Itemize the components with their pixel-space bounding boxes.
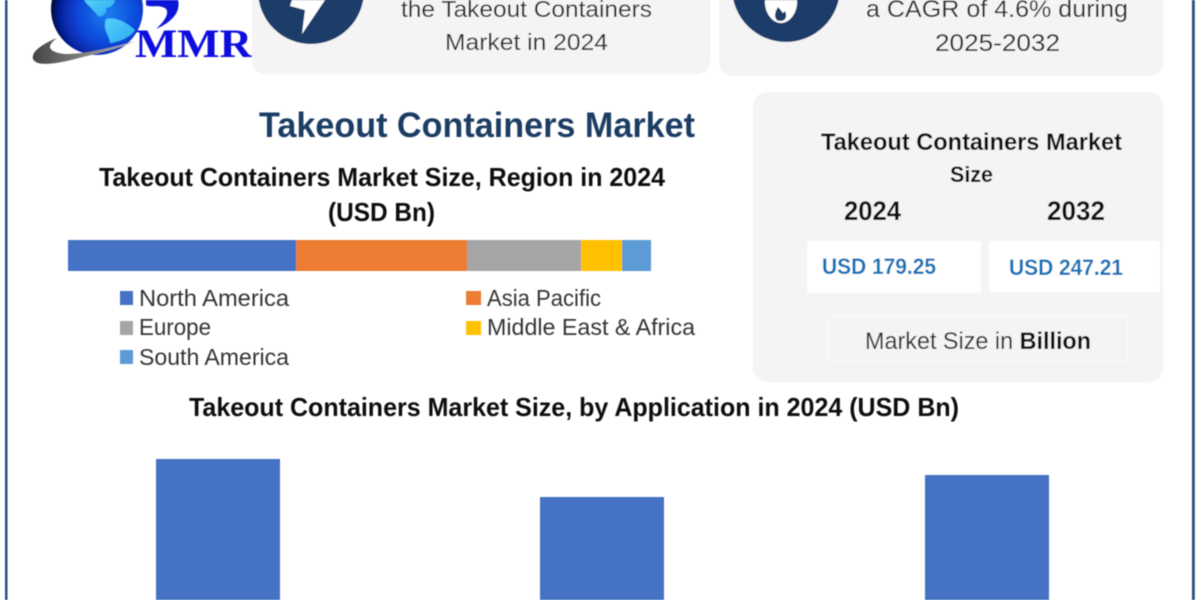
icon: blue swirl <box>146 0 179 29</box>
legend: regions <box>120 285 695 370</box>
bar chart: application <box>156 459 1049 600</box>
panel heading: Size <box>950 162 993 187</box>
unit note: Market Size in Billion <box>865 328 1091 355</box>
icon: globe <box>51 0 143 55</box>
legend: regions: South America <box>139 344 289 370</box>
icon: flame badge <box>732 0 840 42</box>
value box 2024 <box>807 241 981 293</box>
legend: regions: Middle East & Africa <box>487 314 695 340</box>
callout text: CAGR <box>866 0 1128 57</box>
heading: application chart: Takeout Containers Market Size, by Application in 2024 (USD Bn) <box>189 392 959 422</box>
callout text: market value <box>401 0 652 55</box>
legend: regions: Asia Pacific <box>487 285 601 311</box>
panel: CAGR callout <box>719 0 1163 76</box>
panel heading <box>821 129 1122 187</box>
icon: grey swoosh <box>33 38 136 64</box>
legend: regions: Europe <box>139 314 211 340</box>
year labels <box>844 196 1105 226</box>
heading: region chart: (USD Bn) <box>328 197 435 227</box>
value box 2032: USD 247.21 <box>1009 255 1123 280</box>
panel: market value callout <box>252 0 710 74</box>
callout text: CAGR: 2025-2032 <box>935 30 1060 57</box>
callout text: market value: Market in 2024 <box>445 29 608 55</box>
unit note <box>828 316 1128 360</box>
logo wordmark: MMR <box>135 21 253 66</box>
heading: region chart: Takeout Containers Market Size, Region in 2024 <box>99 162 666 192</box>
title: Takeout Containers Market <box>259 106 695 145</box>
heading: region chart <box>99 162 666 227</box>
icon: lightning bolt badge <box>258 0 364 44</box>
value box 2024: USD 179.25 <box>822 254 936 279</box>
panel heading: Takeout Containers Market <box>821 129 1122 156</box>
year labels: 2032 <box>1047 196 1105 226</box>
logo: MMR globe <box>33 0 253 66</box>
panel: market size <box>753 92 1163 382</box>
year labels: 2024 <box>844 196 901 226</box>
chart: stacked regional bar <box>68 240 651 271</box>
value box 2032 <box>989 241 1160 292</box>
legend: regions: North America <box>139 285 289 311</box>
